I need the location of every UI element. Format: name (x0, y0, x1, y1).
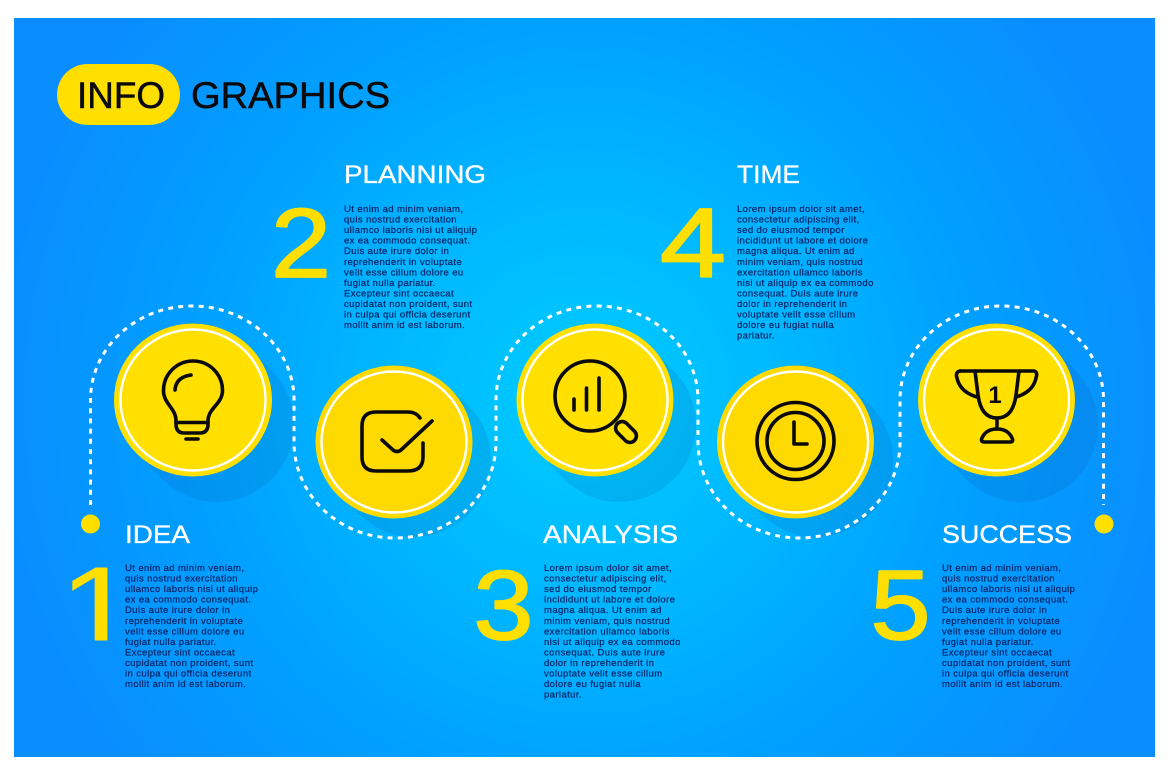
step 3 text: dolore eu fugiat nulla (544, 679, 641, 690)
step 1 text: velit esse cillum dolore eu (125, 626, 245, 637)
step 1 number: 1 (58, 542, 138, 676)
icon: checkbox (362, 412, 432, 471)
step 4 text: magna aliqua. Ut enim ad (737, 246, 855, 257)
step 2 circle: planning (316, 366, 472, 518)
step 5 text: Ut enim ad minim veniam, (942, 563, 1061, 574)
step 5 heading: SUCCESS (942, 521, 1072, 549)
step 5 circle: success (918, 324, 1075, 476)
step 1 text: in culpa qui officia deserunt (125, 669, 252, 680)
step 1 text: reprehenderit in voluptate (125, 616, 243, 627)
step 5 text: velit esse cillum dolore eu (942, 626, 1062, 637)
step 4 heading: TIME (737, 161, 800, 189)
step 3 text: dolor in reprehenderit in (544, 658, 654, 669)
step 4 number: 4 (660, 188, 726, 298)
step 2 text: ex ea commodo consequat. (344, 236, 470, 247)
step 4 text: voluptate velit esse cillum (737, 310, 856, 321)
step 2 text: Ut enim ad minim veniam, (344, 204, 463, 215)
step 1 text: Excepteur sint occaecat (125, 647, 235, 658)
step 5 text: ullamco laboris nisi ut aliquip (942, 584, 1075, 595)
title (57, 64, 390, 125)
icon: trophy: 1 (988, 382, 1002, 409)
step 5 text: mollit anim id est laborum. (942, 679, 1063, 690)
step 5 text: reprehenderit in voluptate (942, 616, 1060, 627)
dotted timeline path (90, 306, 1104, 538)
title pill (57, 64, 180, 125)
icon: magnifier with bars (555, 361, 639, 445)
step 3 heading: ANALYSIS (543, 521, 678, 549)
step 5 text: cupidatat non proident, sunt (942, 658, 1070, 669)
step 3 text: Lorem ipsum dolor sit amet, (544, 563, 672, 574)
step 3 text: exercitation ullamco laboris (544, 626, 670, 637)
step 4 text: Lorem ipsum dolor sit amet, (737, 204, 865, 215)
step 2 text: velit esse cillum dolore eu (344, 267, 464, 278)
step 2 text: Excepteur sint occaecat (344, 288, 454, 299)
step 1 text: cupidatat non proident, sunt (125, 658, 253, 669)
step 3 text: consectetur adipiscing elit, (544, 574, 667, 585)
step 2 text: in culpa qui officia deserunt (344, 310, 471, 321)
step 3 text: nisi ut aliquip ex ea commodo (544, 637, 681, 648)
step 4 text: consectetur adipiscing elit, (737, 215, 860, 226)
step 3 text: pariatur. (544, 690, 582, 701)
step 2 text: cupidatat non proident, sunt (344, 299, 472, 310)
step 3 text: voluptate velit esse cillum (544, 669, 663, 680)
step 3 text: incididunt ut labore et dolore (544, 595, 675, 606)
step 4 text: minim veniam, quis nostrud (737, 257, 863, 268)
step 2 number: 2 (271, 188, 331, 298)
step 4 text: nisi ut aliquip ex ea commodo (737, 278, 874, 289)
step 2 heading: PLANNING (344, 161, 486, 189)
step 3 circle: analysis (516, 324, 674, 476)
step 1 text: Duis aute irure dolor in (125, 605, 230, 616)
step 4 text: exercitation ullamco laboris (737, 267, 863, 278)
path end dot (1094, 514, 1114, 534)
icon: clock (757, 402, 834, 480)
step 5 text: Excepteur sint occaecat (942, 647, 1052, 658)
step 1 text: mollit anim id est laborum. (125, 679, 246, 690)
icon: light bulb (164, 361, 222, 439)
step 5 text: Duis aute irure dolor in (942, 605, 1047, 616)
step 4 circle: time (717, 366, 874, 518)
step 4 text: incididunt ut labore et dolore (737, 236, 868, 247)
step 4 text: dolor in reprehenderit in (737, 299, 847, 310)
step 5 text: quis nostrud exercitation (942, 574, 1055, 585)
path start dot (81, 514, 100, 534)
step 3 text: minim veniam, quis nostrud (544, 616, 670, 627)
title word: INFO: INFO (77, 75, 165, 116)
step 4 text: sed do eiusmod tempor (737, 225, 845, 236)
step 3 text: magna aliqua. Ut enim ad (544, 605, 662, 616)
step 5 text: fugiat nulla pariatur. (942, 637, 1034, 648)
step 5 number: 5 (870, 550, 930, 660)
step 1 heading: IDEA (125, 521, 190, 549)
step 1 text: quis nostrud exercitation (125, 574, 238, 585)
step 1 text: ex ea commodo consequat. (125, 595, 251, 606)
step 4 text: dolore eu fugiat nulla (737, 320, 834, 331)
step 3 text: consequat. Duis aute irure (544, 647, 665, 658)
step 3 text: sed do eiusmod tempor (544, 584, 652, 595)
title word: GRAPHICS: GRAPHICS (191, 75, 390, 116)
step 4 text: pariatur. (737, 331, 775, 342)
icon: trophy (956, 371, 1037, 442)
step 1 text: Ut enim ad minim veniam, (125, 563, 244, 574)
step 5 text: ex ea commodo consequat. (942, 595, 1068, 606)
step 1 text: fugiat nulla pariatur. (125, 637, 217, 648)
step 2 text: Duis aute irure dolor in (344, 246, 449, 257)
step 2 text: reprehenderit in voluptate (344, 257, 462, 268)
step 4 text: consequat. Duis aute irure (737, 288, 858, 299)
step 3 number: 3 (474, 550, 534, 660)
circle long shadows (193, 400, 1021, 460)
step 2 text: mollit anim id est laborum. (344, 320, 465, 331)
step 1 circle: idea (114, 324, 272, 476)
step 2 text: ullamco laboris nisi ut aliquip (344, 225, 477, 236)
step 1 text: ullamco laboris nisi ut aliquip (125, 584, 258, 595)
step 2 text: fugiat nulla pariatur. (344, 278, 436, 289)
step 5 text: in culpa qui officia deserunt (942, 669, 1069, 680)
step 2 text: quis nostrud exercitation (344, 215, 457, 226)
